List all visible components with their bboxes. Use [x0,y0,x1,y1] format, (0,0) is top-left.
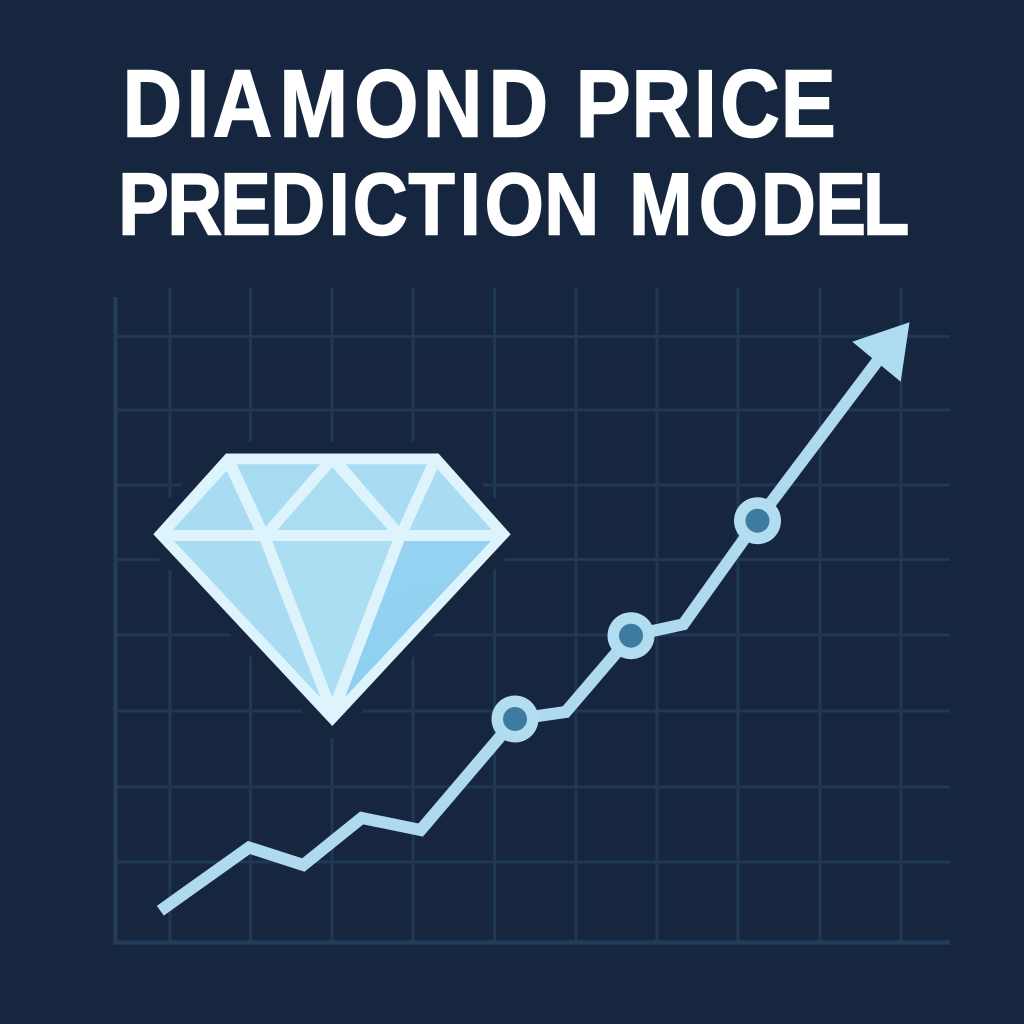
title [118,50,909,254]
chart grid [115,288,950,942]
title: PREDICTION MODEL [118,155,909,254]
data point 1 [492,696,538,742]
data point 3 [734,497,781,544]
data point 2 [608,612,654,659]
title: DIAMOND PRICE [122,50,836,157]
arrow head [852,322,910,382]
line chart: price trend [160,322,910,911]
icon: diamond [153,454,511,726]
